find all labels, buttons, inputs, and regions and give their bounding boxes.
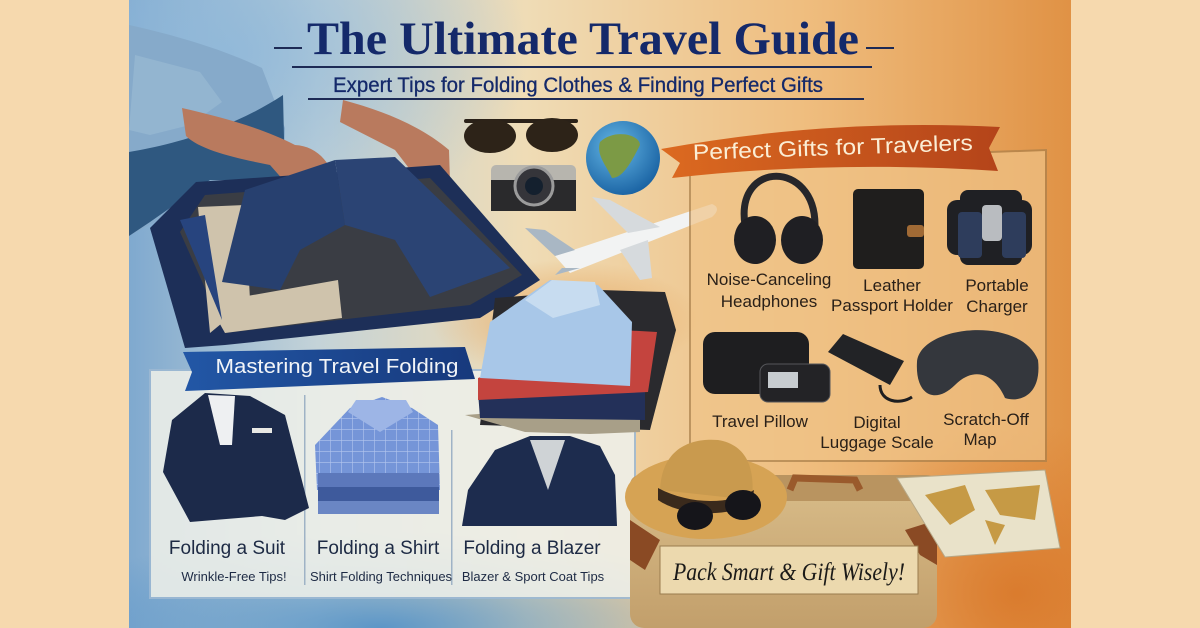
icon: luggage scale	[828, 334, 912, 401]
panel: folding	[150, 347, 635, 598]
suitcase with hat	[630, 475, 937, 628]
label: suit: Wrinkle-Free Tips!	[181, 569, 287, 584]
icon: airplane	[525, 197, 717, 280]
icon: camera	[491, 165, 576, 211]
label: scratch-off map: Map	[963, 430, 997, 449]
label: shirt: Folding a Shirt	[317, 538, 440, 559]
icon: world map	[897, 470, 1060, 557]
label: blazer: Folding a Blazer	[463, 538, 601, 559]
icon: neck pillow	[917, 330, 1038, 399]
folded clothes stack	[465, 280, 676, 434]
label: luggage scale: Digital	[853, 413, 901, 432]
label: blazer	[462, 538, 605, 584]
icon: portable charger	[947, 190, 1032, 265]
heading banner: folding: Mastering Travel Folding	[216, 356, 458, 378]
title: The Ultimate Travel Guide	[307, 13, 859, 65]
label: shirt: Shirt Folding Techniques	[310, 569, 453, 584]
label: travel pillow: Travel Pillow	[712, 412, 809, 431]
title block	[274, 13, 894, 100]
icon: straw hat	[625, 440, 787, 539]
label: shirt	[310, 538, 453, 584]
icon: globe	[586, 121, 660, 195]
background panel	[129, 0, 1071, 628]
person packing	[129, 25, 450, 236]
label plate: Pack Smart & Gift Wisely!	[672, 559, 905, 586]
icon: suit	[163, 393, 309, 522]
label: passport holder: Leather	[863, 276, 921, 295]
label: suit: Folding a Suit	[169, 538, 286, 559]
label: scratch-off map	[943, 410, 1029, 449]
heading banner: gifts: Perfect Gifts for Travelers	[692, 130, 973, 165]
label: headphones	[707, 270, 831, 311]
icon: blazer	[462, 436, 617, 526]
label: suit	[169, 538, 287, 584]
icon: travel pouch	[703, 332, 830, 402]
panel: gifts	[661, 125, 1046, 461]
heading banner: folding	[183, 347, 475, 391]
label plate	[660, 546, 918, 594]
label: luggage scale: Luggage Scale	[820, 433, 934, 452]
label: luggage scale	[820, 413, 934, 452]
label: blazer: Blazer & Sport Coat Tips	[462, 569, 605, 584]
heading banner: gifts	[661, 125, 1000, 178]
icon: headphones	[734, 176, 823, 264]
icon: shirt	[315, 397, 440, 514]
open suitcase	[150, 157, 540, 348]
label: portable charger: Portable	[965, 276, 1029, 295]
label: passport holder	[831, 276, 953, 315]
label: headphones: Headphones	[721, 292, 817, 311]
label: portable charger	[965, 276, 1029, 316]
subtitle: Expert Tips for Folding Clothes & Finding Perfect Gifts	[333, 73, 823, 97]
icon: passport holder	[853, 189, 924, 269]
label: passport holder: Passport Holder	[831, 296, 953, 315]
label: scratch-off map: Scratch-Off	[943, 410, 1029, 429]
icon: sunglasses	[464, 118, 578, 153]
label: portable charger: Charger	[966, 297, 1028, 316]
label: headphones: Noise-Canceling	[707, 270, 831, 289]
